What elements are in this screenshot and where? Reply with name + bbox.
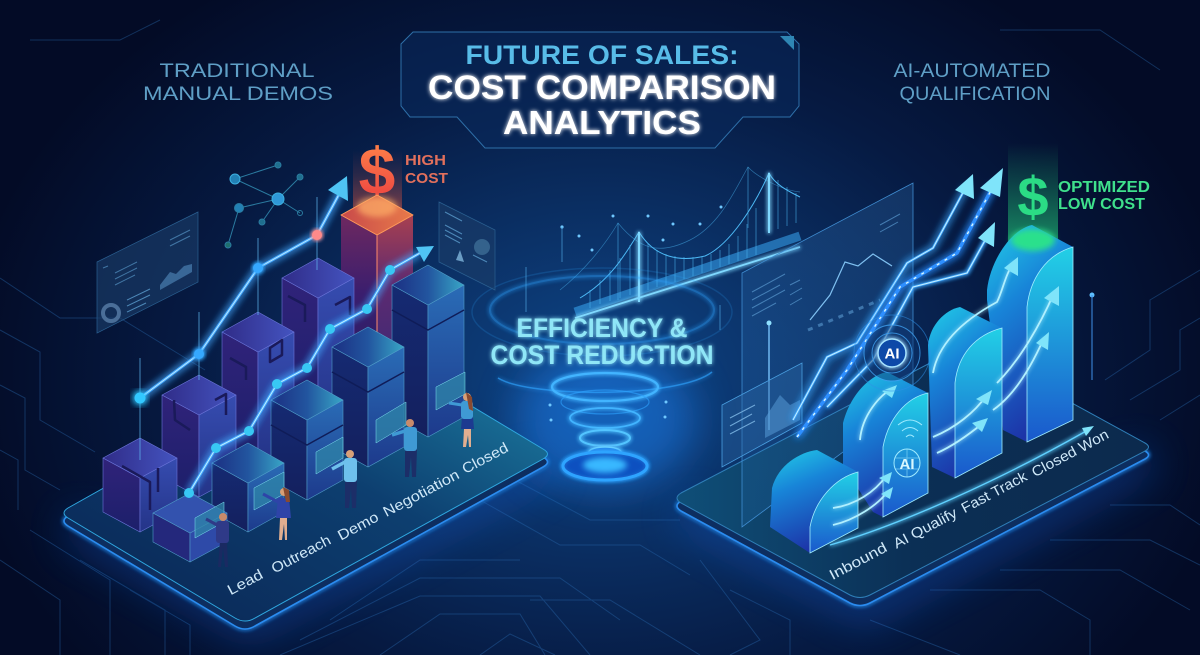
center label: efficiency and cost reduction: [490, 313, 714, 370]
title line 1: FUTURE OF SALES:: [466, 40, 738, 70]
axis labels: manual stages: Negotiation: [381, 467, 462, 521]
heading: AI-automated qualification: [894, 60, 1050, 105]
label: high cost: [405, 153, 448, 187]
signal pin: [1090, 292, 1094, 380]
bars: front row manual stages: [153, 265, 464, 562]
title line 3: ANALYTICS: [503, 104, 701, 141]
axis labels: AI stages: AI Qualify: [891, 505, 961, 552]
screens on blocks: [195, 372, 465, 538]
translucent dashboard front: [722, 363, 802, 467]
axis labels: AI stages: Inbound: [827, 540, 890, 584]
axis arrow: [830, 426, 1094, 545]
axis labels: manual stages: Outreach: [269, 533, 334, 577]
heading: AI-automated qualification: QUALIFICATION: [900, 83, 1050, 105]
axis labels: manual stages: [225, 440, 511, 599]
heading: traditional manual demos: MANUAL DEMOS: [143, 83, 333, 105]
icon: red dollar: $: [359, 134, 395, 208]
rising AI arrows: [793, 185, 994, 437]
bar: closed won: [987, 225, 1073, 442]
label: optimized low cost: OPTIMIZED: [1058, 179, 1150, 196]
translucent dashboard back: [742, 183, 913, 527]
bars: back row manual stages: [103, 258, 354, 532]
axis labels: AI stages: Fast Track: [959, 469, 1031, 517]
label: high cost: HIGH: [405, 153, 446, 169]
heading: traditional manual demos: [143, 60, 333, 105]
arrowheads: [879, 168, 1059, 499]
person 4: [392, 419, 417, 477]
icon: green dollar: $: [1017, 165, 1049, 228]
side data panel left: [97, 212, 198, 333]
network diagram: [225, 162, 303, 248]
AI badge: [854, 315, 930, 391]
center label: efficiency and cost reduction: COST REDUCTION: [490, 340, 714, 370]
person 5: [449, 392, 474, 447]
bar: fast track: [928, 307, 1002, 478]
axis labels: AI stages: Closed Won: [1029, 427, 1112, 481]
bar: high cost block: [341, 195, 413, 413]
label: optimized low cost: LOW COST: [1058, 196, 1145, 213]
center: bridge: [560, 167, 800, 318]
axis labels: manual stages: Lead: [225, 567, 266, 599]
title panel: [401, 32, 799, 148]
bar: AI qualify: AI: [900, 456, 914, 473]
glow behind scene: [70, 458, 1150, 625]
person 3: [332, 450, 357, 508]
panel: AI platform: [677, 143, 1150, 606]
funnel glow: [515, 350, 695, 490]
bar: AI qualify: [843, 372, 928, 517]
person 2: [263, 487, 291, 540]
block arrows: [833, 262, 1054, 525]
AI brain chip: [894, 420, 922, 477]
label: high cost: COST: [405, 171, 448, 187]
title line 2: COST COMPARISON: [428, 69, 776, 107]
person 1: [206, 513, 229, 567]
trend line lower: [184, 246, 434, 498]
center: sparkles: [526, 206, 722, 422]
trend line upper: [134, 176, 348, 460]
axis labels: AI stages: [827, 427, 1112, 584]
axis labels: manual stages: Closed: [460, 440, 511, 478]
heading: AI-automated qualification: AI-AUTOMATED: [894, 60, 1050, 82]
axis labels: manual stages: Demo: [335, 509, 382, 544]
panel: traditional platform: [64, 134, 548, 629]
AI badge: AI: [884, 346, 900, 362]
center label: efficiency and cost reduction: EFFICIENCY &: [516, 313, 688, 343]
center: funnel swirl: [472, 268, 732, 480]
label: optimized low cost: [1058, 179, 1150, 213]
green beam: [1008, 143, 1058, 243]
bar: inbound: [770, 450, 858, 553]
red beam: [353, 150, 402, 216]
heading: traditional manual demos: TRADITIONAL: [160, 60, 315, 82]
side data panel right: [439, 202, 495, 290]
